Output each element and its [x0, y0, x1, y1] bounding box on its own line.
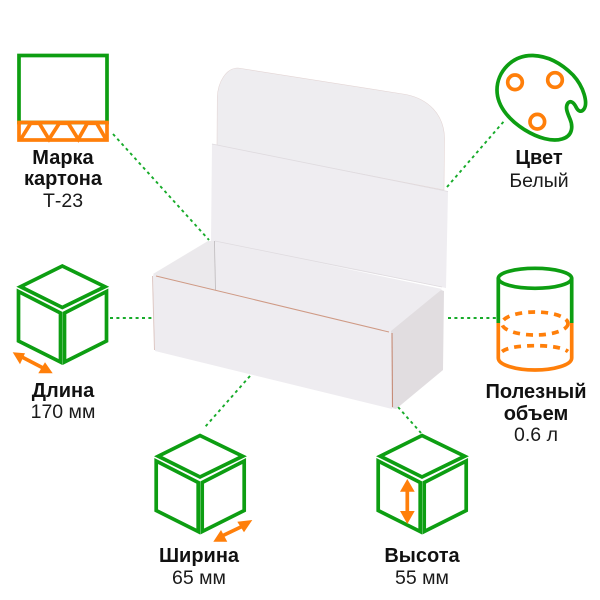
- label: color: Цвет: [515, 147, 563, 169]
- front panel: [153, 275, 392, 409]
- right side: [391, 290, 444, 409]
- label: board grade: Т-23: [43, 190, 83, 212]
- middle panel: [211, 144, 448, 288]
- label: height: Высота: [384, 545, 461, 567]
- label: length: 170 мм: [31, 401, 95, 423]
- label: width: Ширина: [159, 545, 240, 567]
- label: board grade: Марка: [32, 147, 95, 169]
- label: width: 65 мм: [172, 567, 226, 589]
- box photo: [152, 68, 448, 409]
- label: board grade: [24, 147, 103, 212]
- icon: palette: [497, 55, 586, 140]
- label: length: [31, 380, 95, 423]
- label: usable volume: объем: [504, 403, 568, 425]
- label: board grade: картона: [24, 168, 103, 190]
- leader lines: [110, 120, 505, 433]
- inner left wall: [153, 241, 216, 292]
- label: color: Белый: [509, 170, 569, 192]
- label: usable volume: 0.6 л: [514, 424, 558, 446]
- inner back wall: [215, 241, 442, 333]
- label: width: [159, 545, 240, 589]
- label: length: Длина: [32, 380, 95, 402]
- icon: height cube: [378, 436, 466, 532]
- icon: length cube: [13, 266, 107, 373]
- label: usable volume: Полезный: [485, 381, 587, 403]
- icon: corrugated board: [19, 56, 107, 140]
- label: usable volume: [485, 381, 587, 446]
- label: height: 55 мм: [395, 567, 449, 589]
- label: height: [384, 545, 461, 589]
- icon: width cube: [156, 436, 252, 542]
- icon: cylinder volume: [498, 268, 572, 370]
- label: color: [509, 147, 569, 192]
- back flap: [217, 68, 444, 190]
